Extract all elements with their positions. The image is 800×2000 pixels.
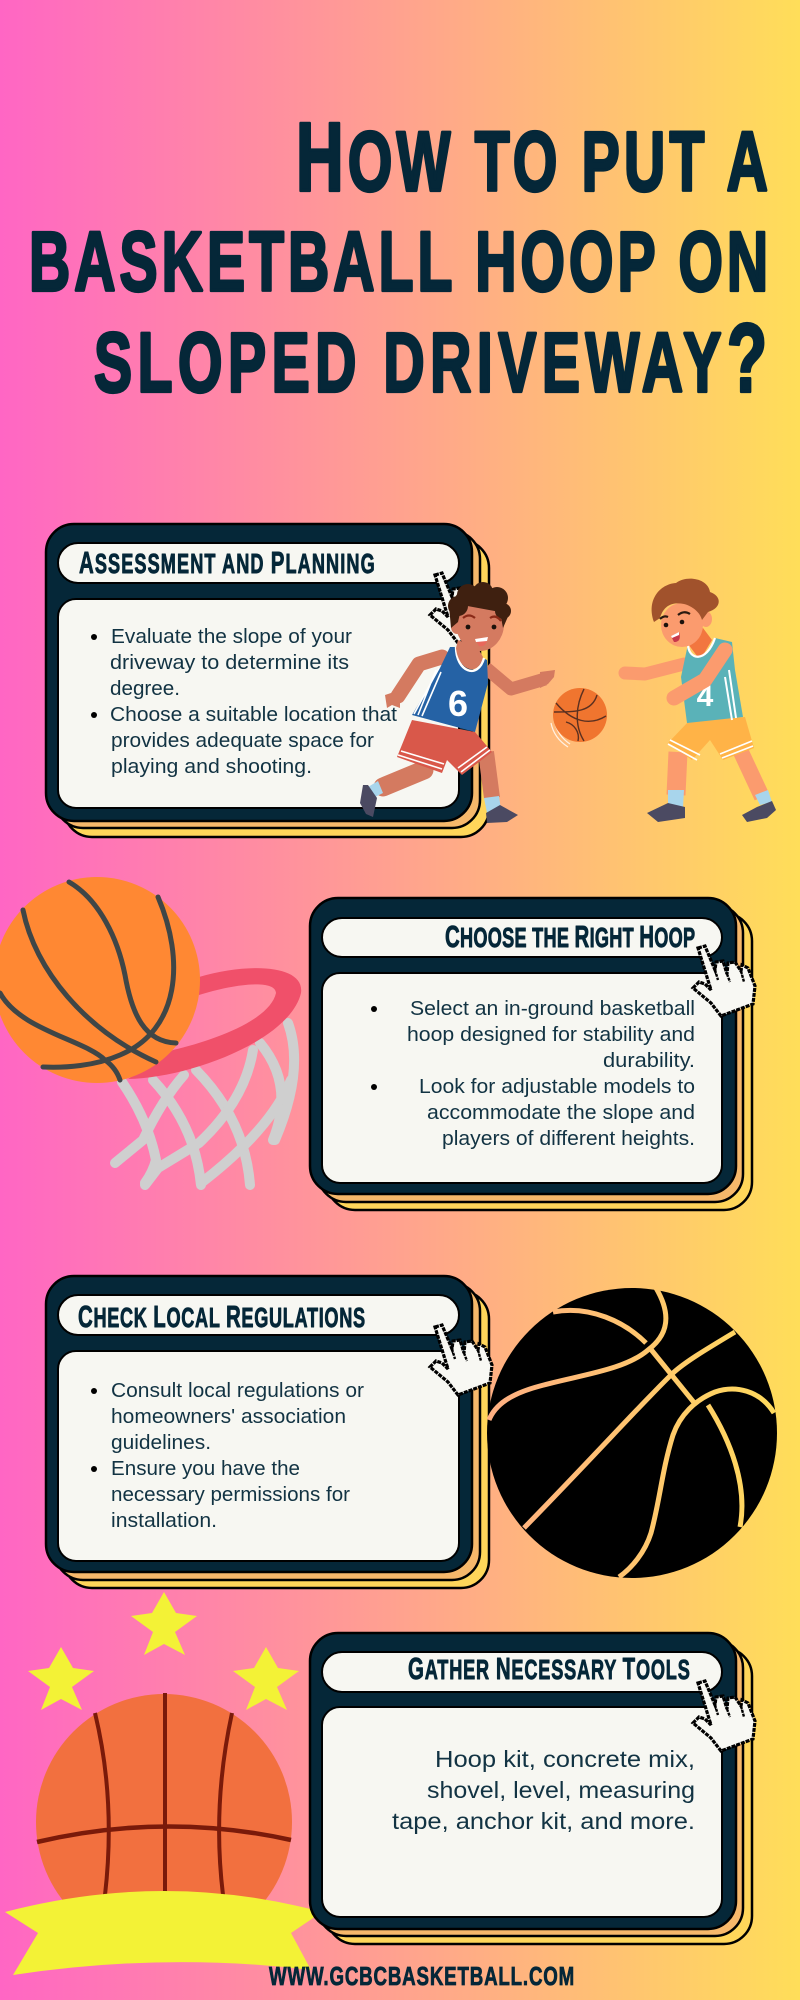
heading: CHECK LOCAL REGULATIONS — [78, 1299, 365, 1334]
bullet list: Select an in-ground basketball — [410, 998, 695, 1020]
rim — [128, 968, 301, 1079]
star: left — [28, 1647, 94, 1710]
bullet list — [91, 1380, 364, 1532]
illustration: small basketball — [551, 688, 607, 747]
ball seams — [554, 689, 606, 741]
bullet list: driveway to determine its — [110, 652, 349, 674]
bullet list: playing and shooting. — [111, 756, 312, 778]
head — [451, 620, 463, 634]
star: right — [233, 1647, 299, 1710]
footer website: WWW.GCBCBASKETBALL.COM — [269, 1961, 574, 1991]
bullet list: Choose a suitable location that — [110, 704, 397, 726]
bullet list: guidelines. — [111, 1432, 211, 1454]
bullet list: accommodate the slope and — [427, 1102, 695, 1124]
panel: assessment and planning — [46, 524, 489, 837]
shorts — [668, 717, 754, 760]
illustration: black basketball — [487, 1288, 777, 1578]
net — [115, 1023, 294, 1185]
panel: choose the right hoop — [310, 898, 752, 1210]
bullet list: homeowners' association — [111, 1406, 346, 1428]
back leg — [383, 770, 424, 787]
face details — [664, 623, 668, 627]
hair — [448, 582, 511, 628]
body text — [392, 1746, 695, 1834]
title: SLOPED DRIVEWAY? — [94, 304, 767, 413]
icon: pointing hand cursor — [693, 946, 755, 1016]
bullet list: provides adequate space for — [111, 730, 374, 752]
hair — [652, 579, 719, 622]
title: BASKETBALL HOOP ON — [29, 216, 768, 309]
near arm — [674, 650, 725, 698]
socks — [668, 790, 684, 807]
body box — [58, 599, 459, 808]
stacked card layers — [310, 1633, 752, 1944]
shorts — [397, 720, 492, 775]
stacked card layers — [310, 898, 752, 1210]
jersey number: 6 — [448, 683, 468, 724]
ball seams — [489, 1288, 774, 1577]
bullet list: hoop designed for stability and — [407, 1024, 695, 1046]
body text: shovel, level, measuring — [427, 1777, 695, 1803]
heading: GATHER NECESSARY TOOLS — [408, 1651, 690, 1686]
illustration: player number 4 — [625, 579, 776, 822]
ball seams — [37, 1693, 291, 1900]
bullet list: durability. — [603, 1050, 695, 1072]
illustration: stars — [28, 1592, 299, 1710]
ball seams — [0, 882, 176, 1080]
heading: ASSESSMENT AND PLANNING — [79, 545, 375, 580]
neck — [456, 640, 483, 669]
heading pill — [58, 1295, 459, 1335]
bullet list: Ensure you have the — [111, 1458, 300, 1480]
bullet list: Evaluate the slope of your — [111, 626, 352, 648]
bullet list: Look for adjustable models to — [419, 1076, 695, 1098]
icon: pointing hand cursor — [693, 1681, 755, 1751]
body box — [322, 1707, 722, 1917]
panel: check local regulations — [46, 1276, 489, 1588]
star: top — [131, 1592, 197, 1655]
stacked card layers — [46, 524, 489, 837]
illustration: basketball going through hoop — [0, 877, 301, 1185]
jersey — [681, 638, 743, 723]
bullet list: players of different heights. — [442, 1128, 695, 1150]
shoes — [647, 803, 685, 822]
body text: tape, anchor kit, and more. — [392, 1808, 695, 1834]
jersey number: 4 — [697, 680, 714, 713]
title: HOW TO PUT A — [296, 103, 768, 212]
panel: gather necessary tools — [310, 1633, 752, 1944]
jersey — [412, 647, 488, 732]
neck — [688, 628, 712, 660]
stacked card layers — [46, 1276, 489, 1588]
bullet list — [91, 626, 397, 778]
head — [700, 611, 712, 627]
arms — [398, 657, 442, 696]
illustration: orange basketball — [36, 1693, 292, 1950]
face details — [466, 625, 470, 629]
legs — [676, 752, 678, 795]
far arm — [625, 664, 684, 674]
bullet list: degree. — [110, 678, 180, 700]
heading pill — [58, 543, 459, 583]
bullet list: necessary permissions for — [111, 1484, 350, 1506]
icon: pointing hand cursor — [430, 573, 492, 643]
body text: Hoop kit, concrete mix, — [435, 1746, 695, 1772]
motion lines — [551, 723, 570, 747]
icon: pointing hand cursor — [430, 1325, 492, 1395]
title — [29, 103, 768, 413]
bullet list: installation. — [111, 1510, 217, 1532]
bullet list — [371, 998, 695, 1150]
body box — [58, 1351, 459, 1561]
body box — [322, 973, 722, 1183]
heading pill — [322, 1652, 722, 1692]
heading pill — [322, 918, 722, 957]
bullet list: Consult local regulations or — [111, 1380, 364, 1402]
ribbon banner — [5, 1891, 322, 1975]
heading: CHOOSE THE RIGHT HOOP — [445, 919, 695, 954]
illustration: player number 6 — [360, 582, 555, 823]
front leg — [486, 752, 492, 798]
ball — [0, 877, 200, 1083]
